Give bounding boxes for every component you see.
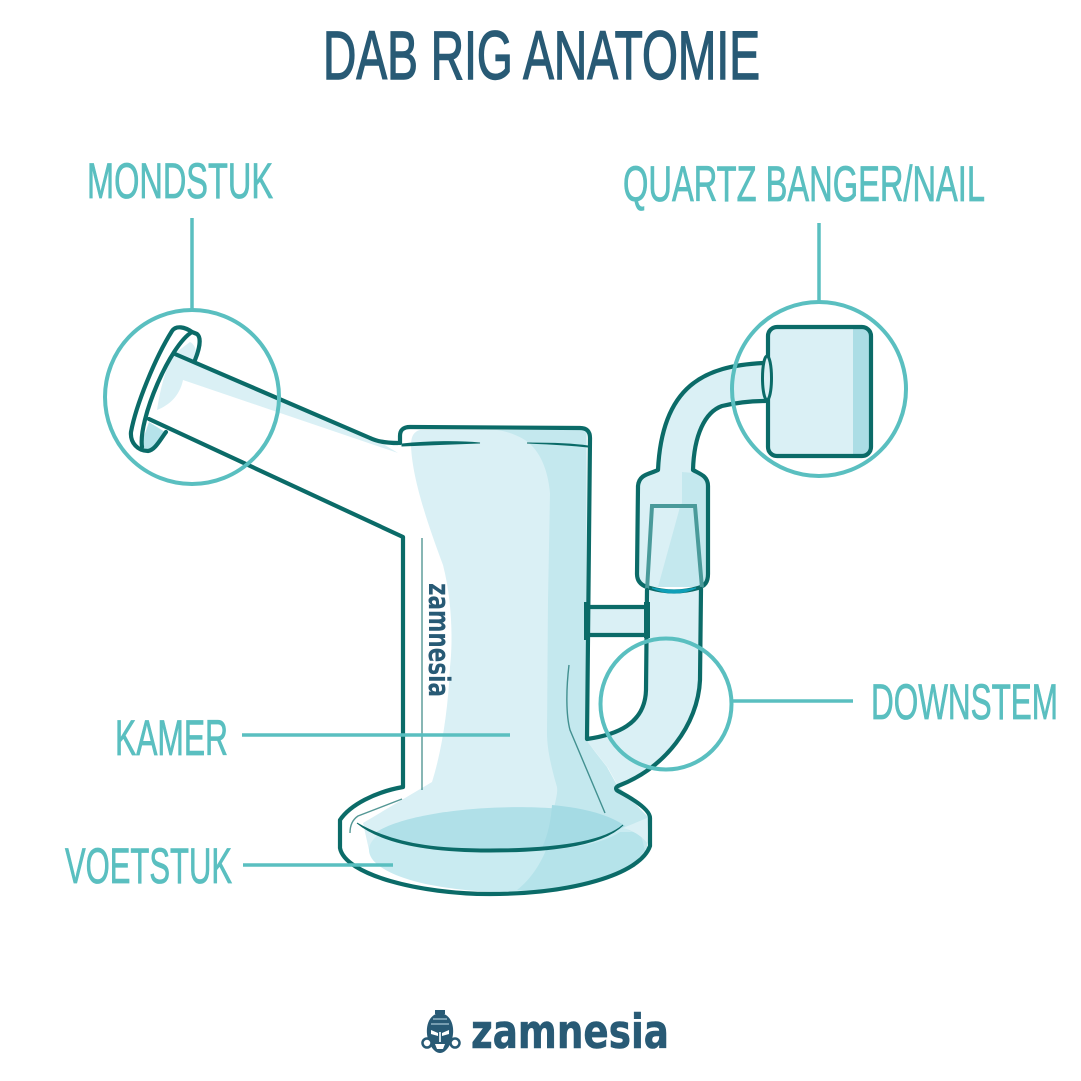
label: mondstuk <box>87 153 279 484</box>
glass fills <box>142 342 765 892</box>
rig outline <box>131 327 701 894</box>
icon: tribal mask <box>422 1010 460 1053</box>
label: voetstuk: VOETSTUK <box>65 838 232 894</box>
quartz banger <box>762 327 871 456</box>
mouthpiece lip <box>131 327 200 451</box>
label: mondstuk: MONDSTUK <box>87 153 273 209</box>
title: DAB RIG ANATOMIE <box>323 17 760 94</box>
label: quartz banger/nail <box>623 156 985 476</box>
label: kamer: KAMER <box>115 710 228 766</box>
label: downstem <box>600 638 1058 770</box>
chamber top and right wall <box>400 427 647 739</box>
inner glass lines <box>350 442 623 852</box>
water meniscus <box>652 588 696 593</box>
mouthpiece tube and body <box>175 354 398 443</box>
base and chamber left wall <box>149 419 701 894</box>
logo <box>422 1005 669 1060</box>
banger elbow and collar outline <box>637 363 765 592</box>
percolator connector <box>584 602 650 640</box>
inner joint <box>647 506 702 590</box>
glass brand text: zamnesia <box>422 583 456 697</box>
wordmark: zamnesia <box>471 1005 669 1060</box>
dab rig illustration <box>131 327 871 894</box>
